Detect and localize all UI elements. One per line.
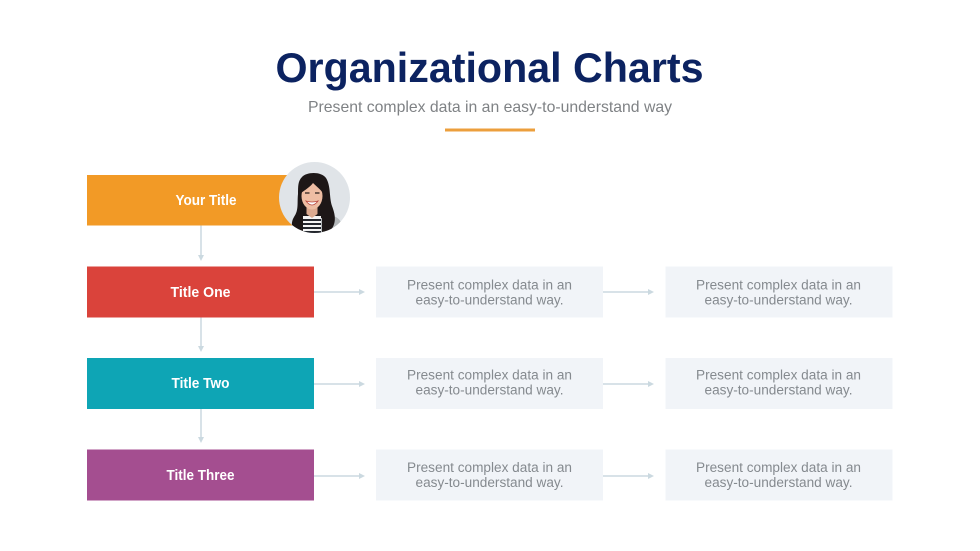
accent rule — [445, 128, 535, 132]
box: title two: Title Two — [172, 375, 230, 392]
row 3 text box, column 1 — [376, 450, 603, 500]
subtitle: Present complex data in an easy-to-understand way — [308, 99, 672, 116]
row 2 text box, column 2: easy-to-understand way. — [704, 382, 852, 398]
row 1 text box, column 1: Present complex data in an — [407, 278, 572, 292]
row 3 text box, column 2: easy-to-understand way. — [704, 475, 852, 490]
row 2 text box, column 1: Present complex data in an — [407, 368, 572, 382]
box: title two — [87, 358, 314, 409]
row 2 text box, column 2: Present complex data in an — [696, 368, 861, 382]
row 2 text box, column 1: easy-to-understand way. — [416, 382, 564, 398]
box: title one: Title One — [170, 284, 230, 301]
arrow: title two to title three — [198, 409, 204, 443]
row 2 text box, column 1 — [376, 358, 603, 409]
title: Organizational Charts — [276, 44, 704, 91]
row 3 text box, column 2 — [666, 450, 892, 500]
row 1 text box, column 2 — [666, 266, 892, 318]
row 3 text box, column 2: Present complex data in an — [696, 460, 861, 475]
arrow: your title to title one — [198, 226, 204, 261]
row 3 connectors — [314, 473, 654, 479]
box: title three: Title Three — [166, 467, 234, 484]
box: title one — [87, 266, 314, 318]
row 2 connectors — [314, 381, 654, 387]
row 2 text box, column 2 — [666, 358, 892, 409]
row 1 connectors — [314, 289, 654, 295]
box: your title — [87, 175, 314, 226]
row 1 text box, column 1 — [376, 266, 603, 318]
arrow: title one to title two — [198, 318, 204, 352]
row 3 text box, column 1: easy-to-understand way. — [416, 475, 564, 490]
box: your title: Your Title — [176, 192, 236, 209]
row 1 text box, column 2: easy-to-understand way. — [704, 292, 852, 308]
icon: portrait photo — [279, 162, 350, 236]
box: title three — [87, 450, 314, 500]
row 1 text box, column 1: easy-to-understand way. — [416, 292, 564, 308]
row 1 text box, column 2: Present complex data in an — [696, 278, 861, 292]
row 3 text box, column 1: Present complex data in an — [407, 460, 572, 475]
